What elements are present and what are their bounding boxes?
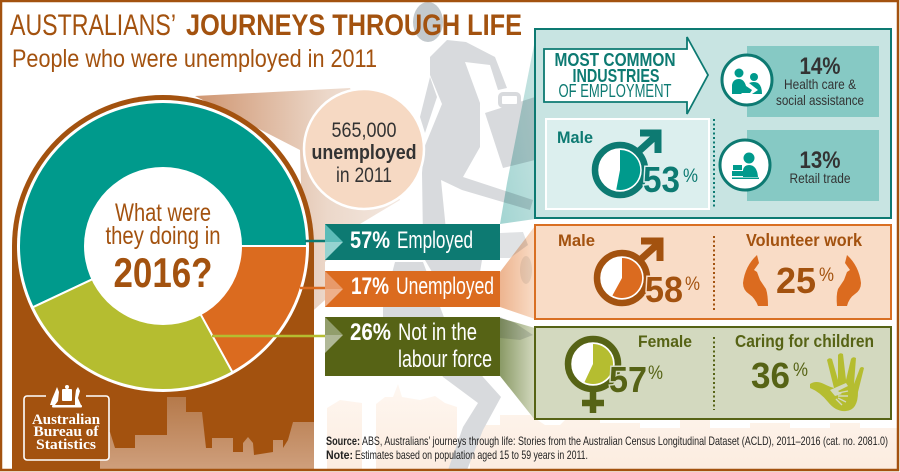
- skyline on brown panel: [100, 397, 314, 469]
- segment: not in the labour force 26%: [33, 246, 232, 390]
- donut centre question: 2016?: [114, 249, 212, 296]
- industry: health care: social assistance: [776, 92, 864, 108]
- title: [10, 9, 522, 42]
- panel: not in the labour force details: Caring for children: [735, 331, 874, 351]
- panel: unemployed details: Male: [558, 231, 595, 250]
- icon: female symbol with 57% fill: [568, 339, 618, 413]
- panel: employed details: [535, 29, 891, 218]
- title: JOURNEYS THROUGH LIFE: [186, 9, 522, 42]
- arrow: most common industries: INDUSTRIES: [572, 66, 660, 86]
- icon: right cupped hand: [837, 255, 861, 306]
- logo: Australian Bureau of Statistics: Statistics: [36, 437, 96, 453]
- panel: unemployed details: %: [685, 274, 700, 295]
- stat: male 53%: 53: [643, 159, 680, 200]
- icon: left cupped hand: [743, 255, 768, 306]
- brown panel with donut ring: [12, 95, 314, 469]
- stat: male 53%: %: [683, 166, 698, 187]
- panel: not in the labour force details: [535, 327, 891, 419]
- industry: retail trade: [720, 130, 879, 201]
- panel: unemployed details: [535, 225, 891, 319]
- banner: 17% unemployed: [325, 271, 500, 307]
- industry: health care: Health care &: [784, 76, 857, 92]
- industry: retail trade: Retail trade: [790, 170, 851, 186]
- icon: male symbol with 53% fill: [595, 133, 658, 195]
- segment: employed 57%: [19, 102, 307, 307]
- icon: male symbol with 58% fill: [597, 241, 660, 303]
- icon: retail worker at register: [732, 152, 759, 179]
- banner: 26% not in the labour force: labour force: [398, 346, 492, 373]
- panel: not in the labour force details: Female: [638, 332, 692, 351]
- peach cone from unemployed circle to donut: [195, 88, 400, 318]
- panel: unemployed details: %: [819, 265, 834, 286]
- donut centre question: What were: [115, 199, 211, 227]
- banner: 57% employed: [325, 224, 500, 260]
- industry: health care: 14%: [800, 53, 840, 80]
- panel: unemployed details: 58: [645, 269, 683, 310]
- logo: Australian Bureau of Statistics: [24, 385, 109, 460]
- panel: unemployed details: Volunteer work: [746, 230, 862, 250]
- panel: not in the labour force details: 36: [751, 355, 790, 396]
- banner: 57% employed: Employed: [397, 227, 473, 254]
- icon: coat of arms: [50, 385, 82, 408]
- donut centre question: [106, 199, 220, 296]
- stat: male 53%: Male: [557, 128, 593, 147]
- arrow: most common industries: OF EMPLOYMENT: [558, 81, 672, 101]
- arrow: most common industries: MOST COMMON: [554, 50, 676, 70]
- stat: male 53%: [546, 119, 709, 209]
- banner: 57% employed: 57%: [350, 227, 390, 254]
- subtitle: People who were unemployed in 2011: [12, 45, 377, 73]
- logo: Australian Bureau of Statistics: Australian: [32, 412, 101, 428]
- donut chart: [17, 100, 309, 392]
- icon: adult hand holding child hand: [810, 353, 864, 411]
- arrow: most common industries: [544, 37, 708, 114]
- source and note: [326, 434, 888, 462]
- source and note: Source:: [326, 434, 360, 448]
- source and note: Estimates based on population aged 15 to 59 years in 2011.: [355, 448, 588, 462]
- icon: two people consulting: [732, 68, 762, 94]
- source and note: Note:: [326, 448, 353, 462]
- cones to detail panels: [500, 40, 535, 420]
- silhouette: walking figure with briefcase: [383, 2, 535, 470]
- callout: 565,000 unemployed: unemployed: [312, 142, 416, 164]
- logo: Australian Bureau of Statistics: Bureau of: [34, 424, 100, 440]
- banner: 17% unemployed: 17%: [351, 273, 389, 300]
- industry: retail trade: 13%: [800, 147, 840, 174]
- banner: 17% unemployed: Unemployed: [396, 273, 494, 300]
- title: AUSTRALIANS’: [10, 9, 176, 42]
- callout: 565,000 unemployed: 565,000: [332, 119, 396, 142]
- panel: not in the labour force details: %: [648, 363, 663, 384]
- donut centre question: they doing in: [106, 222, 220, 250]
- banner: 26% not in the labour force: [325, 317, 500, 376]
- callout: 565,000 unemployed: [304, 89, 424, 209]
- callout: 565,000 unemployed: in 2011: [336, 164, 392, 187]
- banner: 26% not in the labour force: Not in the: [398, 319, 477, 346]
- connector lines: [212, 241, 326, 336]
- panel: unemployed details: 25: [776, 260, 816, 301]
- panel: not in the labour force details: 57: [609, 359, 647, 400]
- background skyline: [327, 384, 897, 469]
- banner: 26% not in the labour force: 26%: [350, 319, 391, 346]
- industry: health care: [722, 46, 879, 117]
- panel: not in the labour force details: %: [793, 360, 808, 381]
- segment: unemployed 17%: [163, 246, 307, 372]
